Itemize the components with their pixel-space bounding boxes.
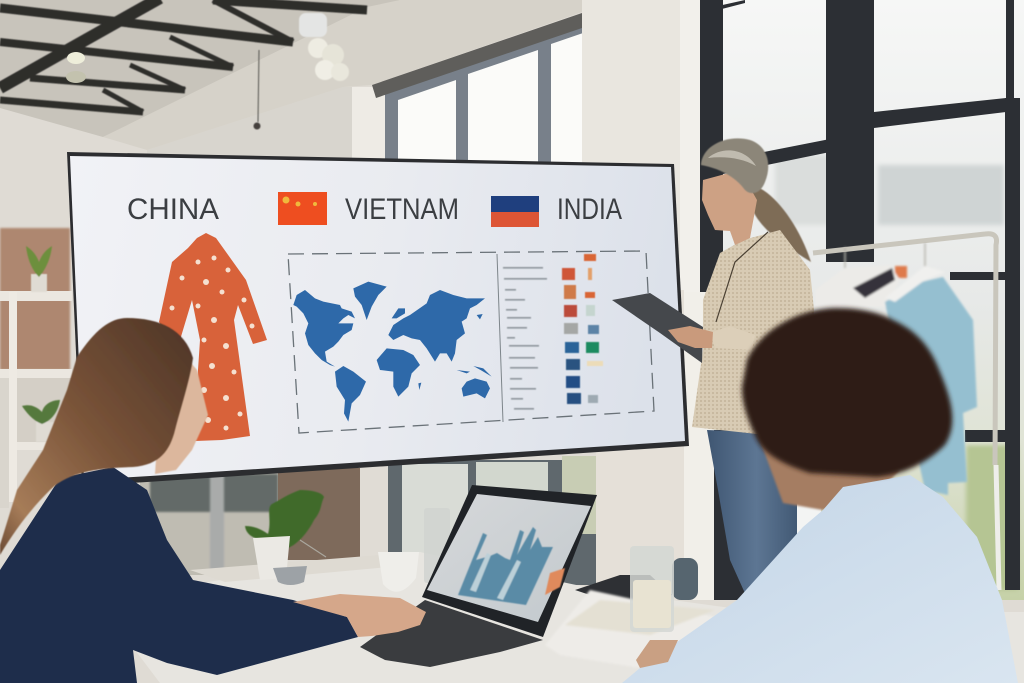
ceiling with dark beams — [0, 0, 582, 150]
wall screen — [67, 152, 689, 486]
left woman hand — [293, 594, 426, 637]
presenter hand — [668, 326, 713, 348]
screen heading: INDIA: INDIA — [557, 193, 622, 226]
clothes rack — [813, 234, 999, 590]
legend text lines — [503, 267, 547, 410]
dashed map panel — [288, 251, 654, 433]
laptop — [360, 485, 597, 667]
white gap behind man — [797, 503, 821, 535]
left woman face — [155, 350, 208, 474]
presenter hair — [701, 138, 768, 193]
table — [135, 552, 1024, 683]
coffee cup and water glass — [378, 508, 450, 592]
icon: shelf plants — [22, 246, 60, 442]
presenter arm — [710, 326, 755, 350]
presenter necklace — [716, 232, 768, 322]
world map — [293, 282, 492, 422]
left woman hair — [0, 318, 193, 555]
screen heading: VIETNAM: VIETNAM — [345, 193, 459, 226]
flag: China — [278, 192, 327, 225]
flag: India — [491, 196, 539, 227]
lower left window and pillar behind screen — [140, 462, 388, 575]
man neck — [758, 435, 900, 510]
woman at left — [0, 318, 426, 683]
legend colour swatches — [562, 254, 603, 404]
back windows — [372, 13, 598, 585]
left woman blazer — [0, 467, 358, 683]
pendant light — [254, 13, 349, 130]
central column — [582, 0, 714, 600]
hanging shirts — [815, 243, 977, 495]
desk plant in white pot — [245, 490, 326, 585]
presenter woman — [612, 138, 814, 600]
tablet — [612, 293, 703, 363]
screen heading: CHINA: CHINA — [127, 193, 219, 226]
laptop bar chart — [458, 527, 565, 605]
presenter jeans — [707, 430, 806, 600]
man curly hair — [742, 308, 952, 477]
brick wall and shelves — [0, 228, 72, 508]
man shirt — [622, 475, 1018, 683]
presenter ponytail — [750, 185, 811, 262]
water glass front — [630, 546, 674, 632]
man hand — [636, 640, 678, 668]
papers and notebook — [545, 558, 720, 668]
man at right — [622, 308, 1018, 683]
presenter face — [702, 170, 757, 245]
presenter sweater — [692, 230, 814, 434]
orange dress — [159, 233, 267, 441]
large right window — [698, 0, 1024, 600]
